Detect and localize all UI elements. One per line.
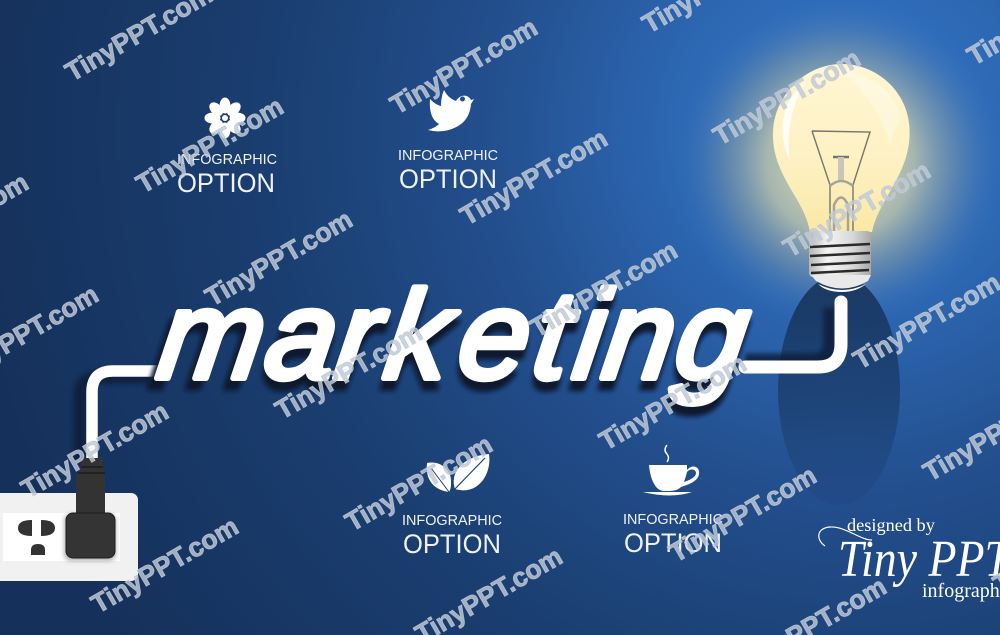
light glow: [675, 0, 1000, 327]
icon: leaves: [427, 454, 489, 492]
watermarks: TinyPPT.com: [340, 429, 497, 537]
socket plate: [0, 493, 138, 581]
title text: marketing: [151, 265, 757, 405]
plug ridges: [78, 467, 105, 473]
watermarks: TinyPPT.com: [385, 12, 542, 120]
filament: [812, 131, 870, 232]
watermarks: TinyPPT.com: [86, 511, 243, 619]
option label: INFOGRAPHIC: [177, 152, 277, 168]
power cord right: [745, 302, 841, 367]
option label: INFOGRAPHIC: [402, 513, 502, 529]
watermarks: TinyPPT.com: [778, 155, 935, 263]
option value: OPTION: [177, 168, 275, 198]
cord shadow right: [745, 308, 830, 360]
plug shadow: [64, 514, 116, 561]
socket: [0, 493, 138, 581]
icon: coffee cup: [643, 445, 699, 496]
option label: INFOGRAPHIC: [398, 148, 498, 164]
watermarks: TinyPPT.com: [594, 348, 751, 456]
socket holes: [18, 520, 55, 555]
watermarks: TinyPPT.com: [131, 91, 288, 199]
option value: OPTION: [399, 164, 497, 194]
watermarks: TinyPPT.com: [455, 123, 612, 231]
bulb reflection: [840, 70, 902, 148]
plug body: [66, 513, 115, 558]
watermarks: TinyPPT.com: [200, 204, 357, 312]
option value: OPTION: [403, 529, 501, 559]
watermarks: TinyPPT.com: [708, 43, 865, 151]
title shadow: marketing: [144, 275, 756, 415]
option: coffee cup: [623, 445, 723, 558]
light bulb: [773, 64, 910, 292]
cord shadow left: [80, 377, 150, 462]
option: flower: [177, 98, 277, 198]
option: bird: [398, 90, 498, 194]
credit swash: [819, 527, 872, 546]
screw base: [809, 231, 871, 292]
plug neck: [76, 458, 105, 515]
watermarks: TinyPPT.com: [664, 460, 821, 568]
watermarks: TinyPPT.com: [525, 235, 682, 343]
option label: INFOGRAPHIC: [623, 512, 723, 528]
option value: OPTION: [624, 528, 722, 558]
socket face: [3, 513, 120, 561]
power cord left: [92, 371, 165, 462]
bulb highlight: [783, 82, 806, 162]
icon: bird: [428, 90, 474, 131]
credit: designed by: designed by: [847, 515, 936, 535]
icon: flower: [204, 98, 246, 138]
marketing title: [144, 265, 757, 415]
watermarks: TinyPPT.com: [16, 396, 173, 504]
option: leaves: [402, 454, 502, 559]
plug: [64, 458, 116, 561]
bulb shadow: [778, 275, 900, 505]
bulb glass: [773, 64, 910, 232]
designer credit: [819, 515, 1000, 602]
watermarks: TinyPPT.com: [270, 317, 427, 425]
